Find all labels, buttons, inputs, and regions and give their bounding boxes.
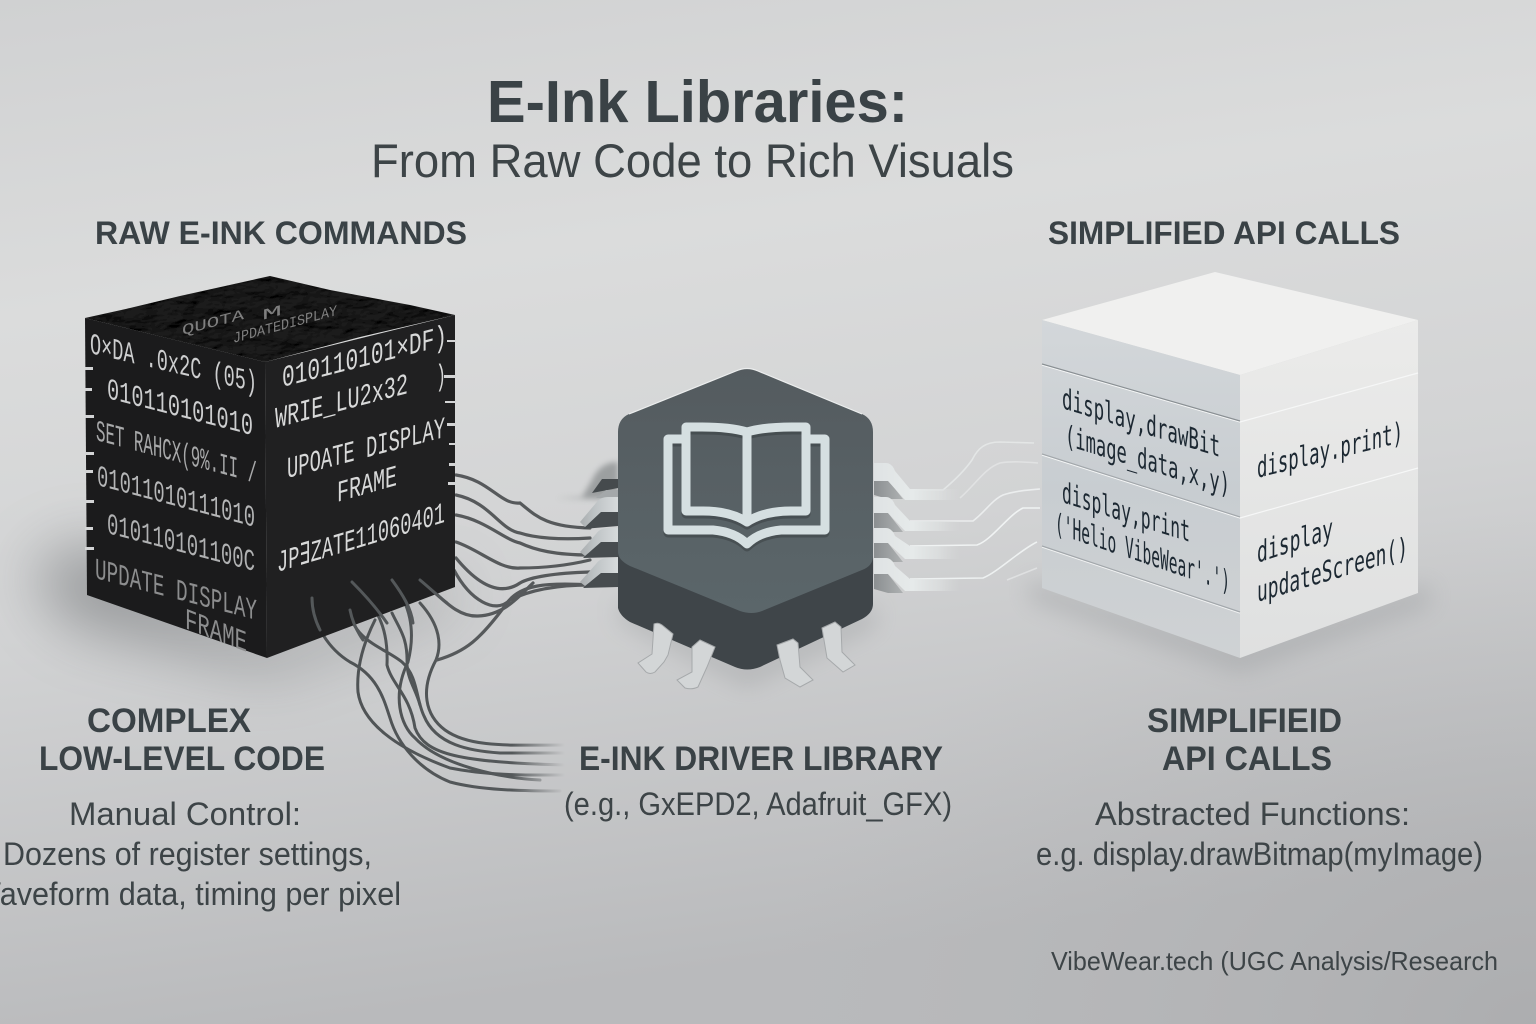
- wire stubs over cube underside: [312, 580, 447, 640]
- caption heading: COMPLEX: [87, 702, 251, 740]
- floor shadows: [30, 540, 1430, 685]
- title: [371, 69, 1014, 187]
- chip hexagon face: [618, 368, 873, 613]
- right face api text: display.print): [1257, 415, 1403, 485]
- left face api text: display,drawBit: [1062, 381, 1220, 464]
- left face api text: [1055, 381, 1230, 600]
- chip legs: [638, 622, 855, 689]
- right face api text: [1257, 415, 1408, 609]
- fine traces: [910, 442, 1040, 580]
- right caption heading: API CALLS: [1162, 740, 1332, 778]
- cube right face: [265, 315, 455, 658]
- right face code: WRIE_LU2x32: [275, 369, 408, 438]
- driver chip: [618, 368, 873, 689]
- pins: [874, 463, 960, 591]
- right face code: 010110101×DF): [282, 321, 447, 397]
- caption heading: [39, 702, 325, 778]
- left face code: SET RAHCX(9%.II /: [96, 416, 257, 493]
- chip body side: [618, 540, 873, 670]
- right face code: FRAME: [337, 461, 397, 512]
- cube left face: [85, 318, 267, 658]
- right face code: JP∃ZATE11060401: [277, 497, 445, 582]
- left face code: 01011010111010: [97, 461, 255, 537]
- subtitle: From Raw Code to Rich Visuals: [371, 134, 1014, 187]
- chip pins right with traces: [874, 442, 1040, 593]
- embossed text on top: [182, 302, 337, 348]
- chip pins left: [556, 462, 618, 588]
- title: E-Ink Libraries:: [487, 69, 908, 135]
- caption heading: LOW-LEVEL CODE: [39, 740, 325, 778]
- right face code: [275, 321, 447, 582]
- embossed text on top: QUOTA: [182, 306, 245, 340]
- right face api text: updateScreen(): [1257, 530, 1408, 609]
- pin shadows: [874, 480, 903, 593]
- right face code: UPOATE DISPLAY: [287, 413, 445, 488]
- right face api text: display: [1257, 512, 1333, 571]
- embossed text on top: JPDATEDISPLAY: [233, 302, 337, 348]
- driver library heading: E-INK DRIVER LIBRARY: [579, 740, 943, 778]
- left face code: UPDATE DISPLAY: [95, 554, 257, 630]
- right caption: [1036, 702, 1483, 872]
- caption body: Manual Control:: [69, 796, 301, 832]
- driver library examples: (e.g., GxEPD2, Adafruit_GFX): [564, 786, 952, 822]
- white cube top: [1042, 272, 1418, 375]
- icon: open book: [668, 427, 825, 547]
- right caption heading: [1147, 702, 1342, 778]
- caption body: Dozens of register settings,: [3, 836, 372, 872]
- api calls cube: [1042, 272, 1418, 658]
- left face api text: ('Helio VibeWear'.'): [1055, 507, 1230, 600]
- heading: simplified api calls: SIMPLIFIED API CALLS: [1048, 215, 1400, 251]
- left face api text: display,print: [1062, 476, 1190, 550]
- embossed text on top: M: [262, 302, 282, 325]
- right caption body: Abstracted Functions:: [1095, 796, 1410, 832]
- cube top face: [85, 276, 455, 362]
- left face code: [90, 329, 257, 662]
- right caption body: e.g. display.drawBitmap(myImage): [1036, 836, 1483, 872]
- left face code: FRAME: [185, 604, 247, 662]
- left face code: 010110101010: [107, 374, 253, 445]
- heading: raw e-ink commands: RAW E-INK COMMANDS: [95, 215, 467, 251]
- left face api text: (image_data,x,y): [1065, 418, 1230, 503]
- left face code: 010110101100C: [107, 509, 255, 581]
- left caption: [0, 702, 401, 912]
- white cube right face: [1240, 320, 1418, 658]
- source credit: VibeWear.tech (UGC Analysis/Research: [1051, 946, 1498, 976]
- wires: raw cube to chip: [420, 475, 592, 660]
- center caption: [564, 740, 952, 822]
- right caption heading: SIMPLIFIEID: [1147, 702, 1342, 740]
- right caption body: [1036, 796, 1483, 872]
- raw commands cube: [85, 276, 456, 662]
- right face code: ): [436, 360, 446, 396]
- wires: bottom bundle from raw cube toward driver label: [312, 580, 565, 791]
- white cube left face: [1042, 320, 1240, 658]
- caption body: [0, 796, 401, 912]
- left face code: O×DA .0x2C (05): [90, 329, 257, 402]
